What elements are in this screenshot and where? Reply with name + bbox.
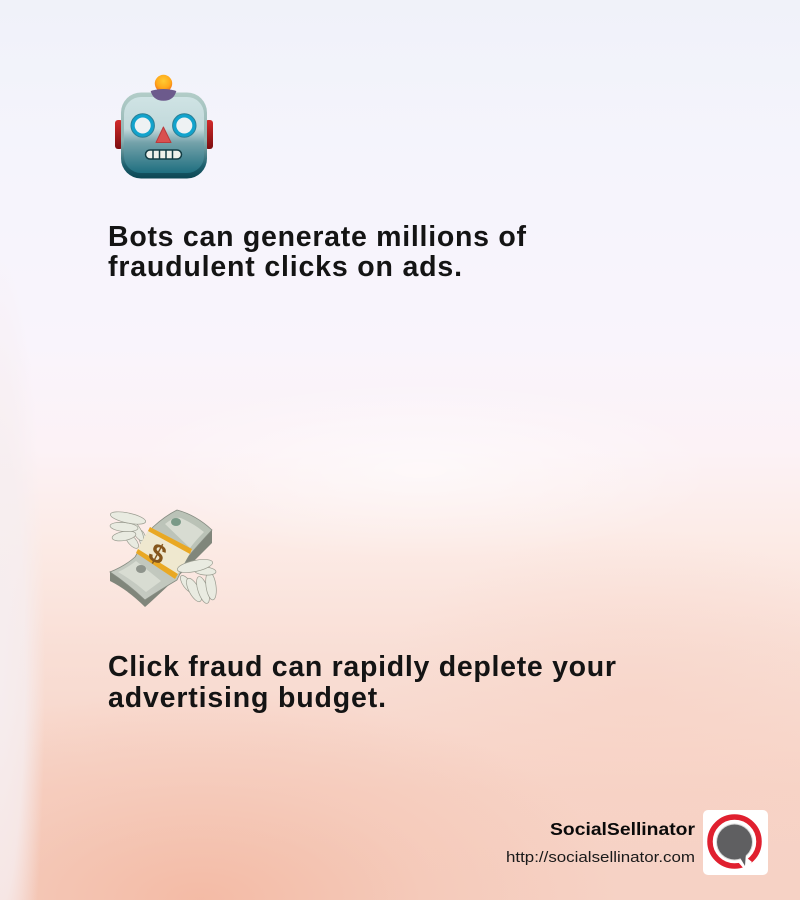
icon: bill stack bbox=[110, 510, 212, 607]
icon: robot ears bbox=[115, 120, 213, 149]
logo bbox=[703, 810, 768, 875]
footer url: http://socialsellinator.com bbox=[506, 849, 695, 866]
icon: robot face bbox=[115, 75, 213, 178]
icon: robot nose bbox=[156, 127, 171, 142]
text: bots statement: fraudulent clicks on ads. bbox=[108, 251, 462, 283]
icon: robot eyes bbox=[131, 114, 196, 137]
text: bots statement: Bots can generate millions of bbox=[108, 221, 526, 253]
robot head bbox=[121, 92, 207, 178]
text: bots statement bbox=[108, 221, 526, 283]
text: click fraud statement: Click fraud can rapidly deplete your bbox=[108, 651, 616, 683]
text: click fraud statement: advertising budget. bbox=[108, 682, 386, 714]
icon: money with wings bbox=[109, 509, 218, 607]
icon: money band: $ bbox=[144, 537, 171, 571]
footer brand name: SocialSellinator bbox=[550, 819, 695, 839]
robot faceplate bbox=[124, 97, 204, 173]
icon: robot antenna bbox=[151, 75, 176, 101]
icon: right wing bbox=[176, 557, 218, 605]
text: click fraud statement bbox=[108, 651, 616, 714]
icon: left wing bbox=[109, 509, 149, 551]
icon: robot mouth bbox=[146, 150, 182, 159]
